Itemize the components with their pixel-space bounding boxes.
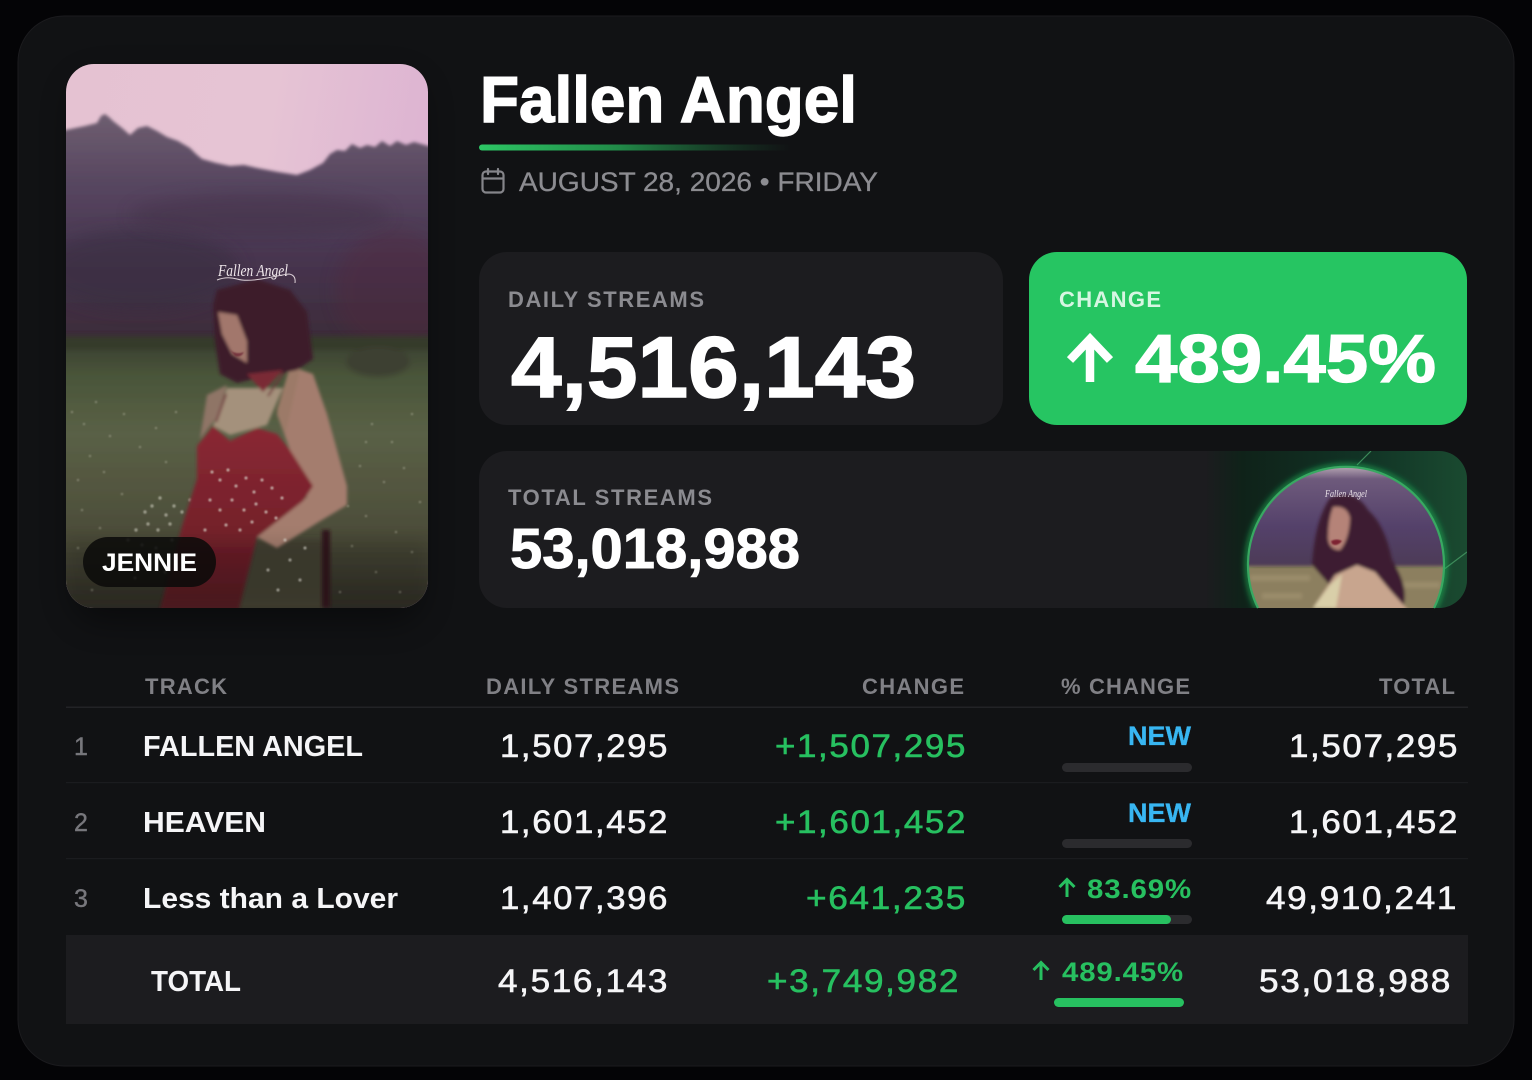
row: Fallen Angel: 1 <box>74 733 88 761</box>
table <box>66 674 1468 1024</box>
panel: daily streams: 4,516,143 <box>511 320 916 416</box>
row: Less than a Lover: 1,407,396 <box>500 880 669 916</box>
row: Heaven: 1,601,452 <box>1289 804 1459 840</box>
row: Less than a Lover: Less than a Lover <box>143 883 398 915</box>
icon: small up arrow <box>1034 962 1048 980</box>
row: Less than a Lover: +641,235 <box>806 880 967 916</box>
row: Fallen Angel: +1,507,295 <box>775 728 967 764</box>
title: Fallen Angel <box>480 63 857 136</box>
table header: % CHANGE <box>1061 674 1190 699</box>
table header: TRACK <box>145 674 227 699</box>
panel: change <box>1029 252 1467 425</box>
panel: daily streams: DAILY STREAMS <box>508 287 704 312</box>
row: Less than a Lover: 49,910,241 <box>1266 880 1458 916</box>
panel: change: CHANGE <box>1059 287 1161 312</box>
row: total: 4,516,143 <box>498 963 669 999</box>
icon: up arrow <box>1070 339 1110 382</box>
album circle thumbnail <box>1240 467 1452 616</box>
artist name pill: JENNIE <box>102 549 197 577</box>
icon: small up arrow <box>1060 880 1074 897</box>
panel: change: 489.45% <box>1135 321 1436 397</box>
table header: TOTAL <box>1379 674 1455 699</box>
row: Heaven: NEW <box>1128 798 1192 828</box>
row: Fallen Angel <box>74 721 1459 772</box>
panel: daily streams <box>479 252 1003 425</box>
row: total <box>66 935 1468 1024</box>
album circle thumbnail: Fallen Angel <box>1324 488 1367 500</box>
panel: total streams: 53,018,988 <box>510 517 800 581</box>
row: total: 53,018,988 <box>1259 963 1452 999</box>
album script logo: Fallen Angel <box>217 261 288 280</box>
row: Fallen Angel: 1,507,295 <box>1289 728 1459 764</box>
row: Heaven <box>74 798 1459 848</box>
row: total: TOTAL <box>151 966 241 998</box>
row: Heaven: 1,601,452 <box>500 804 669 840</box>
table header <box>145 674 1455 699</box>
row: Fallen Angel: 1,507,295 <box>500 728 669 764</box>
row: Less than a Lover: 3 <box>74 885 88 913</box>
row: Heaven: +1,601,452 <box>775 804 967 840</box>
album photo panel <box>66 64 428 608</box>
row: total: 489.45% <box>1062 957 1184 987</box>
icon: calendar <box>482 169 504 192</box>
row: Fallen Angel: FALLEN ANGEL <box>143 731 363 763</box>
row: Heaven: 2 <box>74 809 88 837</box>
panel: total streams: TOTAL STREAMS <box>508 485 712 510</box>
date line: AUGUST 28, 2026 • FRIDAY <box>519 167 878 197</box>
row: Less than a Lover <box>74 874 1458 924</box>
row: total: +3,749,982 <box>767 963 960 999</box>
panel: total streams <box>479 451 1467 616</box>
row: Fallen Angel: NEW <box>1128 721 1192 751</box>
artist name pill <box>83 537 216 587</box>
row: Heaven: HEAVEN <box>143 807 266 839</box>
table header: DAILY STREAMS <box>486 674 679 699</box>
table header: CHANGE <box>862 674 964 699</box>
title underline <box>479 144 791 150</box>
row: Less than a Lover: 83.69% <box>1087 874 1192 904</box>
